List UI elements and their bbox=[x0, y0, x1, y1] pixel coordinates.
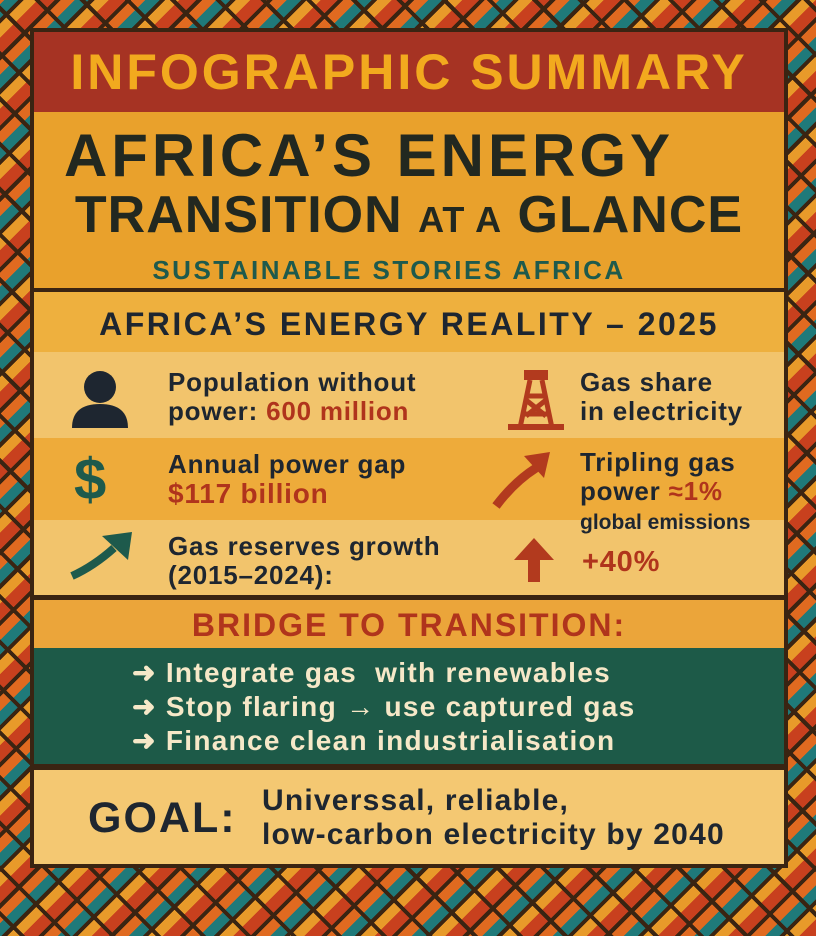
main heading: AFRICA’S ENERGY bbox=[64, 122, 674, 189]
stats panel bbox=[34, 352, 784, 595]
stat: population: power: 600 million bbox=[168, 396, 409, 426]
stat: population bbox=[168, 367, 416, 426]
icon: up arrow bbox=[514, 538, 554, 582]
section heading: energy reality bbox=[34, 292, 784, 352]
stat: tripling gas: global emissions bbox=[580, 511, 750, 534]
icon: dollar: $ bbox=[74, 447, 106, 512]
goal text bbox=[262, 784, 725, 851]
section heading: energy reality: AFRICA’S ENERGY REALITY – 2025 bbox=[99, 306, 719, 342]
title band bbox=[34, 32, 784, 112]
goal panel bbox=[34, 770, 784, 864]
goal text: Universsal, reliable, bbox=[262, 784, 569, 817]
bridge list: ➜ Integrate gas with renewables bbox=[132, 657, 611, 688]
stat: power gap: Annual power gap bbox=[168, 449, 406, 479]
icon: person bbox=[72, 371, 128, 428]
stat: tripling gas: power ≈1% bbox=[580, 476, 723, 506]
stat: gas reserves bbox=[168, 531, 440, 590]
stat: gas reserves: (2015–2024): bbox=[168, 560, 334, 590]
stat: gas reserves: Gas reserves growth bbox=[168, 531, 440, 561]
stat: +40%: +40% bbox=[582, 546, 660, 578]
stat: tripling gas: Tripling gas bbox=[580, 447, 736, 477]
section heading: bridge: BRIDGE TO TRANSITION: bbox=[192, 607, 626, 643]
bridge list bbox=[34, 648, 784, 764]
heading band bbox=[34, 112, 784, 288]
main heading line 2: TRANSITION AT A GLANCE bbox=[75, 186, 743, 244]
subtitle: SUSTAINABLE STORIES AFRICA bbox=[152, 255, 626, 285]
icon: red curved arrow bbox=[492, 452, 550, 509]
icon: gas rig bbox=[508, 370, 564, 430]
stat: power gap: $117 billion bbox=[168, 478, 329, 509]
goal text: low-carbon electricity by 2040 bbox=[262, 818, 725, 851]
stat: power gap bbox=[168, 449, 406, 509]
stat: gas share: in electricity bbox=[580, 396, 743, 426]
section heading: bridge bbox=[34, 600, 784, 648]
icon: green curved arrow bbox=[70, 532, 132, 580]
stat: population: Population without bbox=[168, 367, 416, 397]
goal label: GOAL: bbox=[88, 794, 237, 842]
bridge list: ➜ Finance clean industrialisation bbox=[132, 725, 615, 756]
stat: gas share bbox=[580, 367, 743, 426]
bridge list: ➜ Stop flaring → use captured gas bbox=[132, 691, 636, 722]
title band: INFOGRAPHIC SUMMARY bbox=[70, 44, 748, 100]
stat: gas share: Gas share bbox=[580, 367, 713, 397]
stat: tripling gas bbox=[580, 447, 750, 534]
